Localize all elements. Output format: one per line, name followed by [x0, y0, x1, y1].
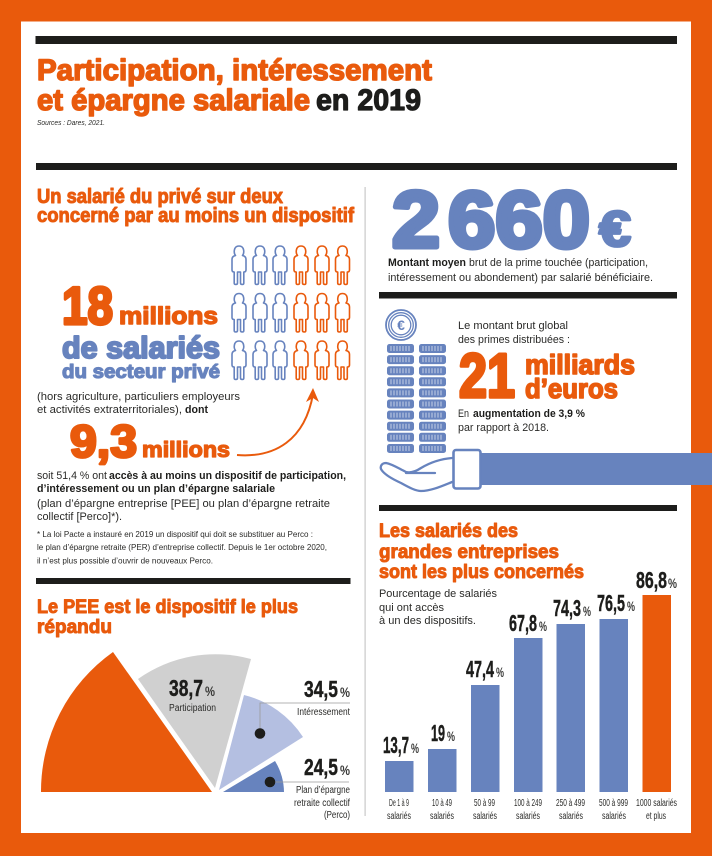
text: total intro — [458, 320, 570, 346]
bar: 50 to 99 — [466, 656, 504, 822]
text: de salariés du secteur privé: du secteur privé — [62, 362, 220, 383]
text: access description: soit 51,4 % ont — [37, 470, 107, 482]
heading: large companies — [379, 520, 584, 583]
big number: 9,3 millions — [70, 416, 230, 467]
top black rule — [36, 36, 677, 44]
text: increase — [458, 408, 585, 434]
title — [37, 54, 432, 117]
big number: 9,3 millions: 9,3 — [70, 416, 137, 467]
text: chart description: Pourcentage de salariés — [379, 588, 497, 600]
callout: 34,5 % intéressement: Intéressement — [297, 707, 350, 718]
bar: 1 to 9 — [383, 732, 419, 822]
text: average bonus description: Montant moyen — [388, 257, 466, 269]
big number: 21 milliards d'euros — [459, 342, 635, 411]
bar: 50 to 99: 47,4 — [466, 656, 494, 682]
bar: 500 to 999: 76,5 — [597, 590, 625, 616]
bar: 10 to 49: 10 à 49 — [432, 798, 452, 809]
text: scope: et activités extraterritoriales), — [37, 404, 182, 416]
big number: 18 millions — [62, 277, 218, 336]
footnote — [37, 530, 327, 566]
bar: 100 to 249: 67,8 — [509, 610, 537, 636]
text: average bonus description — [388, 257, 653, 284]
bar: 1 to 9: % — [411, 740, 419, 756]
big number: 9,3 millions: millions — [142, 437, 230, 462]
right column black rule — [379, 292, 677, 298]
text: increase: augmentation de 3,9 % — [473, 408, 585, 420]
bar: 100 to 249: salariés — [516, 811, 540, 822]
text: scope — [37, 391, 241, 416]
bar: 10 to 49: salariés — [430, 811, 454, 822]
icon: hand and arm — [381, 450, 712, 491]
bar: 500 to 999: salariés — [602, 811, 626, 822]
label: 38,7 % participation — [169, 675, 216, 714]
text: access description — [37, 470, 346, 523]
bar: 250 to 499: 250 à 499 — [556, 798, 585, 809]
label: 38,7 % participation: 38,7 — [169, 675, 203, 701]
big number: 18 millions: millions — [119, 303, 218, 330]
bar: 1000 and more — [636, 567, 677, 822]
bar: 250 to 499: 74,3 — [553, 595, 581, 621]
big number: 21 milliards d'euros: milliards — [525, 349, 635, 380]
arrow — [237, 388, 319, 455]
icon: euro coin — [386, 310, 416, 340]
bar: 50 to 99: salariés — [473, 811, 497, 822]
panel: total bonuses — [381, 310, 712, 491]
big number: 21 milliards d'euros: 21 — [459, 342, 515, 411]
callout: 34,5 % intéressement — [255, 676, 350, 739]
icon: euro coin: € — [397, 317, 405, 333]
bar: 250 to 499: salariés — [559, 811, 583, 822]
left column black rule — [36, 578, 350, 584]
label: 38,7 % participation: Participation — [169, 703, 216, 714]
bar: 100 to 249 — [509, 610, 547, 822]
panel: large companies — [379, 520, 677, 822]
big number: 2 660 €: € — [599, 201, 631, 257]
text: increase: En — [458, 408, 469, 420]
heading: large companies: grandes entreprises — [379, 541, 559, 563]
panel: average bonus — [388, 175, 653, 284]
text: scope: (hors agriculture, particuliers employeurs — [37, 391, 241, 403]
text: scope: dont — [185, 404, 208, 416]
panel: PEE — [37, 596, 350, 821]
text: chart description: à un des dispositifs. — [379, 615, 476, 627]
big number: 2 660 €: 660 — [448, 175, 590, 264]
callout: 24,5 % Perco — [265, 754, 350, 821]
footnote: il n’est plus possible d’ouvrir de nouveaux Perco. — [37, 556, 213, 566]
heading: PEE: répandu — [37, 616, 112, 638]
bar: 1000 and more: 1000 salariés — [636, 798, 677, 809]
callout: 24,5 % Perco: (Perco) — [324, 810, 350, 821]
bar: 100 to 249: % — [539, 618, 547, 634]
text: access description: collectif [Perco]*). — [37, 511, 122, 523]
panel: one employee in two — [37, 186, 354, 566]
big number: 18 millions: 18 — [62, 277, 113, 336]
bar: 500 to 999: 500 à 999 — [599, 798, 628, 809]
text: average bonus description: brut de la prime touchée (participation, — [469, 257, 648, 269]
bar: 50 to 99: % — [496, 664, 504, 680]
heading: large companies: sont les plus concernés — [379, 561, 584, 583]
bar: 10 to 49: 19 — [431, 720, 445, 746]
source line: Sources : Dares, 2021. — [37, 120, 105, 127]
title: Participation, intéressement — [37, 54, 432, 87]
text: access description: accès à au moins un dispositif de participation, — [109, 470, 346, 482]
bar: 1 to 9: salariés — [387, 811, 411, 822]
text: de salariés du secteur privé: de salariés — [62, 330, 220, 365]
callout: 24,5 % Perco: Plan d’épargne — [296, 785, 350, 796]
bar: 250 to 499 — [553, 595, 591, 822]
bar: 10 to 49: % — [447, 728, 455, 744]
text: chart description: qui ont accès — [379, 602, 444, 614]
title: en 2019 — [316, 84, 421, 117]
big number: 2 660 €: 2 — [392, 175, 440, 264]
text: access description: d’intéressement ou un plan d’épargne salariale — [37, 483, 275, 495]
second black rule — [36, 163, 677, 170]
callout: 24,5 % Perco: retraite collectif — [294, 798, 350, 809]
text: chart description — [379, 588, 497, 627]
bar chart — [383, 567, 677, 822]
text: total intro: des primes distribuées : — [458, 334, 570, 346]
heading: one employee in two: Un salarié du privé sur deux — [37, 186, 283, 208]
bar: 50 to 99: 50 à 99 — [474, 798, 495, 809]
vertical divider — [364, 187, 366, 816]
bar: 500 to 999 — [597, 590, 635, 822]
text: increase: par rapport à 2018. — [458, 422, 549, 434]
heading: PEE: Le PEE est le dispositif le plus — [37, 596, 298, 618]
text: access description: (plan d’épargne entreprise [PEE] ou plan d’épargne retraite — [37, 498, 330, 510]
bar: 1 to 9: 13,7 — [383, 732, 409, 758]
bar: 100 to 249: 100 à 249 — [514, 798, 542, 809]
callout: 24,5 % Perco: 24,5 — [304, 754, 338, 780]
right column lower black rule — [379, 505, 677, 511]
bar: 1000 and more: et plus — [646, 811, 666, 822]
footnote: * La loi Pacte a instauré en 2019 un dispositif qui doit se substituer au Perco : — [37, 530, 313, 539]
callout: 34,5 % intéressement: % — [340, 684, 350, 700]
icon: coin stacks — [387, 344, 446, 453]
footnote: le plan d’épargne retraite (PER) d’entreprise collectif. Depuis le 1er octobre 2020, — [37, 543, 327, 552]
chart: radial sectors — [41, 652, 303, 792]
callout: 34,5 % intéressement: 34,5 — [304, 676, 338, 702]
big number: 2 660 € — [392, 175, 631, 264]
icon grid: people — [232, 246, 350, 380]
big number: 21 milliards d'euros: d’euros — [525, 373, 618, 404]
text: total intro: Le montant brut global — [458, 320, 568, 332]
bar: 1 to 9: De 1 à 9 — [389, 798, 409, 809]
bar: 500 to 999: % — [627, 598, 635, 614]
label: 38,7 % participation: % — [205, 683, 215, 699]
heading: PEE — [37, 596, 298, 638]
heading: one employee in two: concerné par au moins un dispositif — [37, 205, 354, 227]
bar: 1000 and more: % — [668, 575, 677, 591]
heading: large companies: Les salariés des — [379, 520, 518, 542]
heading: one employee in two — [37, 186, 354, 227]
text: average bonus description: intéressement ou abondement) par salarié bénéficiaire. — [388, 272, 653, 284]
title: et épargne salariale — [37, 84, 310, 117]
bar: 250 to 499: % — [583, 603, 591, 619]
text: de salariés du secteur privé — [62, 330, 220, 383]
callout: 24,5 % Perco: % — [340, 762, 350, 778]
bar: 10 to 49 — [428, 720, 456, 822]
bar: 1000 and more: 86,8 — [636, 567, 667, 593]
